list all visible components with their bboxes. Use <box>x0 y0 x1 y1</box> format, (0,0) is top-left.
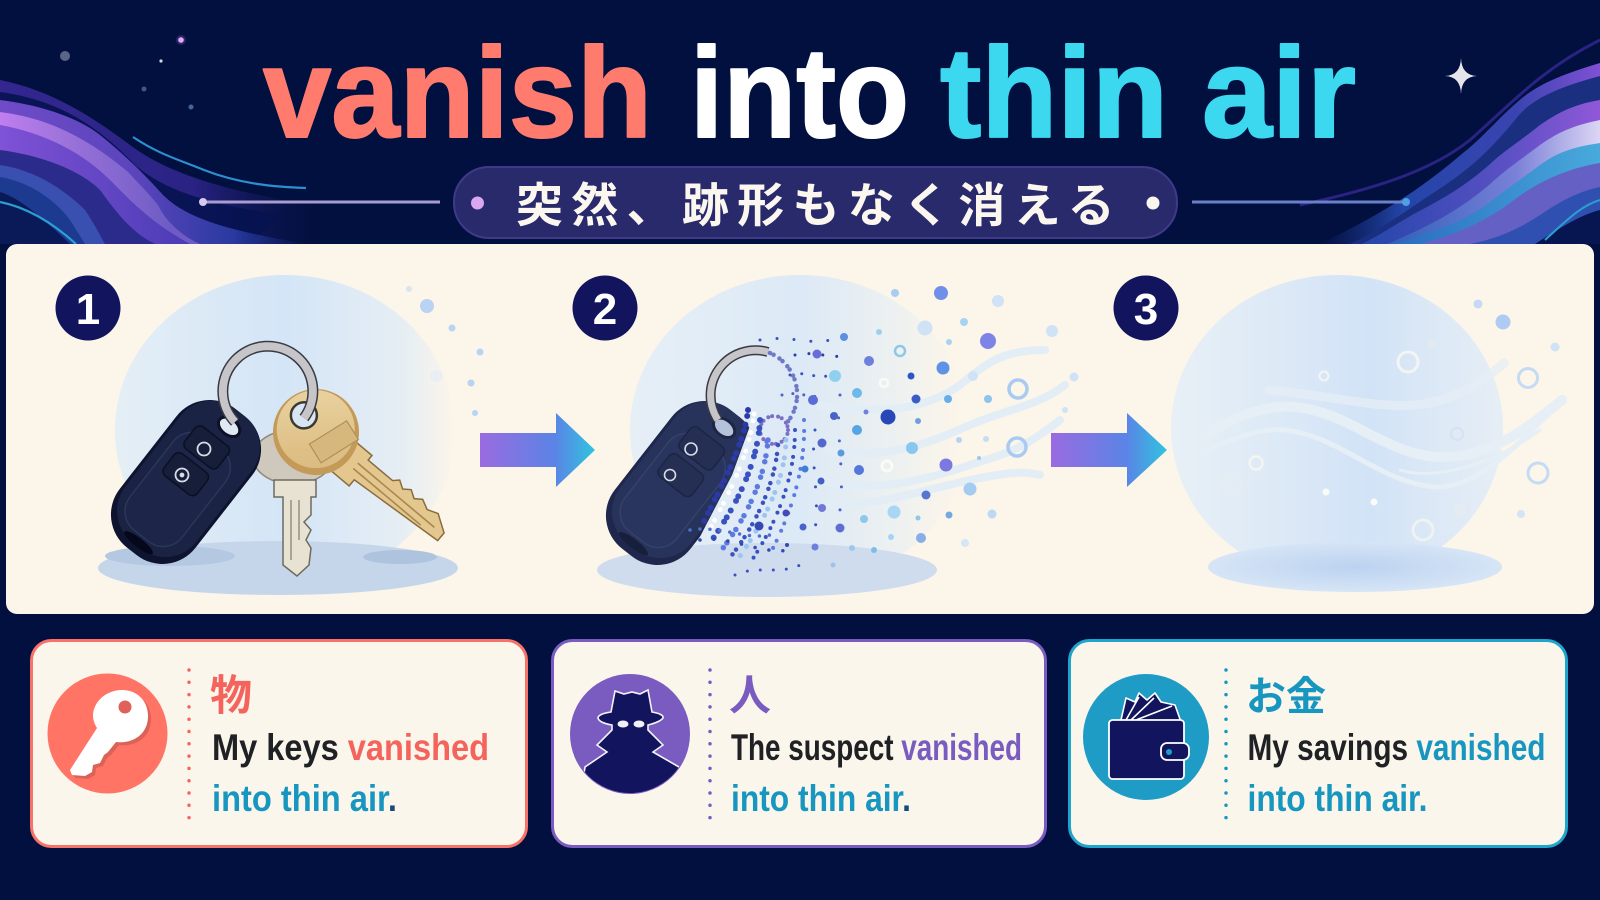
panel: three stages <box>6 244 1594 614</box>
left wave decoration <box>0 80 320 244</box>
stage 2: keys dissolving <box>589 275 1078 597</box>
stage 3: nothing left <box>1171 275 1562 592</box>
wind streaks <box>1200 363 1562 487</box>
icon: white key on coral circle <box>48 674 168 794</box>
card: money: お金 <box>1246 675 1326 719</box>
subtitle pill <box>199 167 1410 238</box>
hollow ring particles <box>880 346 1027 471</box>
icon: silver key <box>253 430 333 576</box>
icon: black key fob <box>94 383 278 581</box>
card: things: into thin air. <box>212 778 397 819</box>
air dots <box>1322 300 1560 518</box>
icon: fob button marks <box>176 442 210 482</box>
right wave decoration <box>1300 40 1600 244</box>
step badge 2: 2 <box>593 285 617 334</box>
card: people: into thin air. <box>731 778 911 819</box>
card: things: 物 <box>210 672 252 719</box>
scattered particles <box>754 286 1078 568</box>
card: people: The suspect vanished <box>731 727 1022 768</box>
subtitle pill: 突然、跡形もなく消える <box>516 179 1123 232</box>
title <box>263 22 1356 165</box>
step badge 1 <box>56 276 120 340</box>
title: thin <box>940 22 1168 165</box>
stars <box>60 35 1477 110</box>
key ring dissolving <box>711 350 797 444</box>
step badge 2 <box>572 276 638 340</box>
card: people: 人 <box>729 672 771 719</box>
icon: key ring <box>223 346 313 422</box>
fob button marks <box>664 443 697 480</box>
dense particle cluster <box>690 339 850 575</box>
icon: detective silhouette on purple circle <box>570 674 690 800</box>
step badge 3: 3 <box>1134 285 1158 334</box>
card: money <box>1070 640 1566 846</box>
card: money: into thin air. <box>1248 778 1428 819</box>
icon: gold key <box>255 371 469 570</box>
air rings <box>1223 352 1548 540</box>
card: money: My savings vanished <box>1248 727 1546 768</box>
step badge 1: 1 <box>76 285 100 334</box>
arrow 2 <box>1051 413 1167 487</box>
card: things <box>32 640 526 846</box>
title: air <box>1202 22 1356 165</box>
title: vanish <box>263 22 652 165</box>
stage 1: keys intact <box>94 275 483 595</box>
step badge 3 <box>1114 276 1178 340</box>
card: things: My keys vanished <box>212 727 489 768</box>
title: into <box>690 22 909 165</box>
icon: wallet on teal circle <box>1083 674 1209 800</box>
arrow 1 <box>480 413 595 487</box>
card: people <box>552 640 1046 846</box>
fob dissolving <box>606 401 750 565</box>
